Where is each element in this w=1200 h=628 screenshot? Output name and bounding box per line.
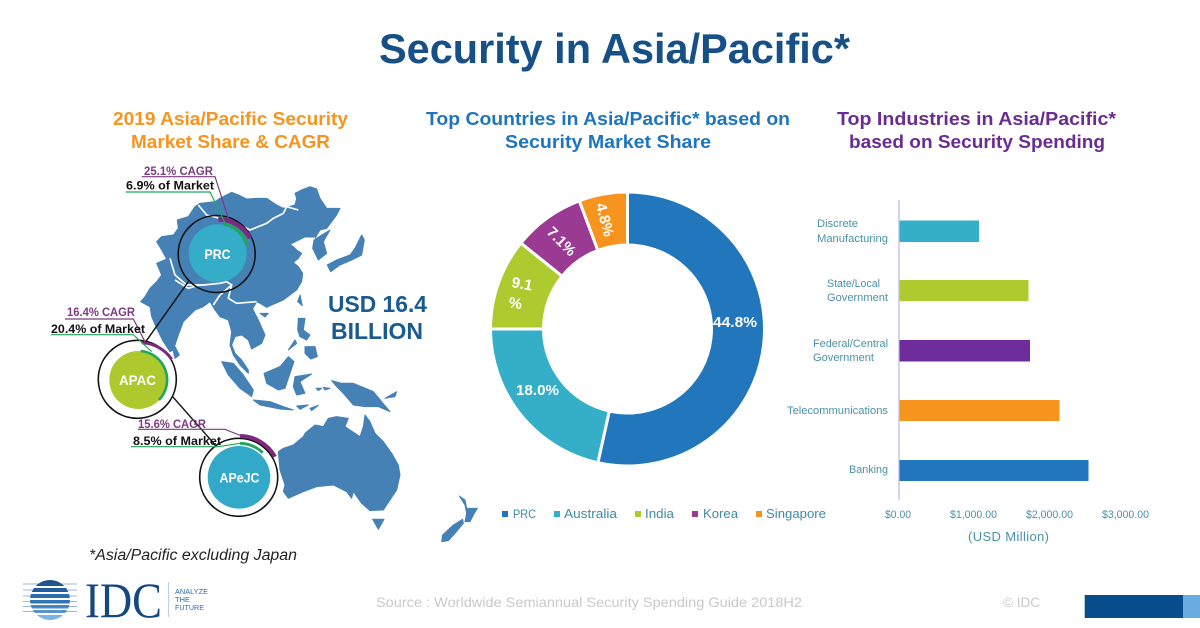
- footnote: *Asia/Pacific excluding Japan: [89, 547, 297, 564]
- donut chart: top countries: %: [507, 294, 523, 313]
- bar chart: top industries: Federal/Central: [813, 338, 888, 350]
- callout: PRC: 6.9% of Market: [126, 178, 214, 192]
- callout: APAC: [51, 305, 176, 418]
- legend: countries: Australia: [564, 506, 618, 521]
- legend: countries: PRC: [513, 507, 536, 521]
- heading: top countries: Security Market Share: [505, 132, 711, 152]
- bar chart: top industries: Telecommunications: [787, 405, 889, 417]
- market total: [328, 291, 427, 344]
- bar chart: top industries: Banking: [849, 464, 888, 476]
- heading: top industries: [837, 109, 1116, 152]
- bar chart: top industries: $0.00: [885, 509, 911, 521]
- map: Asia/Pacific: [141, 187, 477, 542]
- market total: BILLION: [331, 318, 423, 344]
- callout: APeJC: APeJC: [220, 470, 260, 486]
- callout: APeJC: 15.6% CAGR: [138, 417, 206, 431]
- bar chart: top industries: State/Local: [827, 278, 880, 290]
- source note: Source : Worldwide Semiannual Security Spending Guide 2018H2: [376, 594, 802, 610]
- bar chart: top industries: Government: [813, 352, 874, 364]
- donut chart: top countries: [490, 192, 765, 466]
- heading: top industries: based on Security Spending: [849, 132, 1105, 152]
- heading: top industries: Top Industries in Asia/Pacific*: [837, 109, 1116, 129]
- legend: countries: Korea: [703, 506, 739, 521]
- bar chart: top industries: $2,000.00: [1026, 509, 1073, 521]
- heading: top countries: Top Countries in Asia/Pacific* based on: [426, 109, 790, 129]
- donut chart: top countries: 44.8%: [713, 314, 757, 331]
- callout: APeJC: [131, 417, 278, 516]
- footer colour bar: [1085, 595, 1200, 618]
- callout: APAC: 20.4% of Market: [51, 322, 145, 336]
- logo: IDC: ANALYZE: [175, 587, 208, 596]
- bar chart: top industries: Discrete: [817, 218, 858, 230]
- connector lines: [146, 282, 217, 447]
- copyright: © IDC: [1003, 594, 1040, 610]
- legend: countries: Singapore: [766, 506, 826, 521]
- callout: APAC: 16.4% CAGR: [67, 305, 135, 319]
- heading: market share and CAGR: [113, 109, 348, 152]
- heading: market share and CAGR: Market Share & CAGR: [131, 132, 330, 152]
- callout: APAC: APAC: [119, 373, 156, 388]
- bar chart: top industries: Manufacturing: [817, 233, 888, 245]
- callout: PRC: PRC: [204, 247, 231, 262]
- callout: PRC: 25.1% CAGR: [144, 164, 213, 178]
- market total: USD 16.4: [328, 291, 427, 317]
- donut chart: top countries: 4.8%: [592, 201, 617, 239]
- bar chart: top industries: $1,000.00: [950, 509, 997, 521]
- donut chart: top countries: 18.0%: [516, 382, 559, 399]
- donut chart: top countries: 7.1%: [543, 224, 579, 260]
- callout: APeJC: 8.5% of Market: [133, 434, 221, 448]
- title: Security in Asia/Pacific*: [379, 25, 851, 72]
- bar chart: top industries: Government: [827, 292, 888, 304]
- heading: market share and CAGR: 2019 Asia/Pacific Security: [113, 109, 348, 129]
- bar chart: top industries: $3,000.00: [1102, 509, 1149, 521]
- callout: PRC: [126, 164, 255, 292]
- bar chart: top industries: (USD Million): [968, 529, 1049, 544]
- logo: IDC: THE: [175, 595, 190, 604]
- bar chart: top industries: [787, 200, 1149, 544]
- heading: top countries: [426, 109, 790, 152]
- logo: IDC: FUTURE: [175, 603, 204, 612]
- legend: countries: India: [645, 506, 675, 521]
- logo: IDC: IDC: [85, 572, 162, 628]
- donut chart: top countries: 9.1: [510, 274, 534, 295]
- legend: countries: [502, 506, 826, 521]
- logo: IDC: [23, 580, 208, 620]
